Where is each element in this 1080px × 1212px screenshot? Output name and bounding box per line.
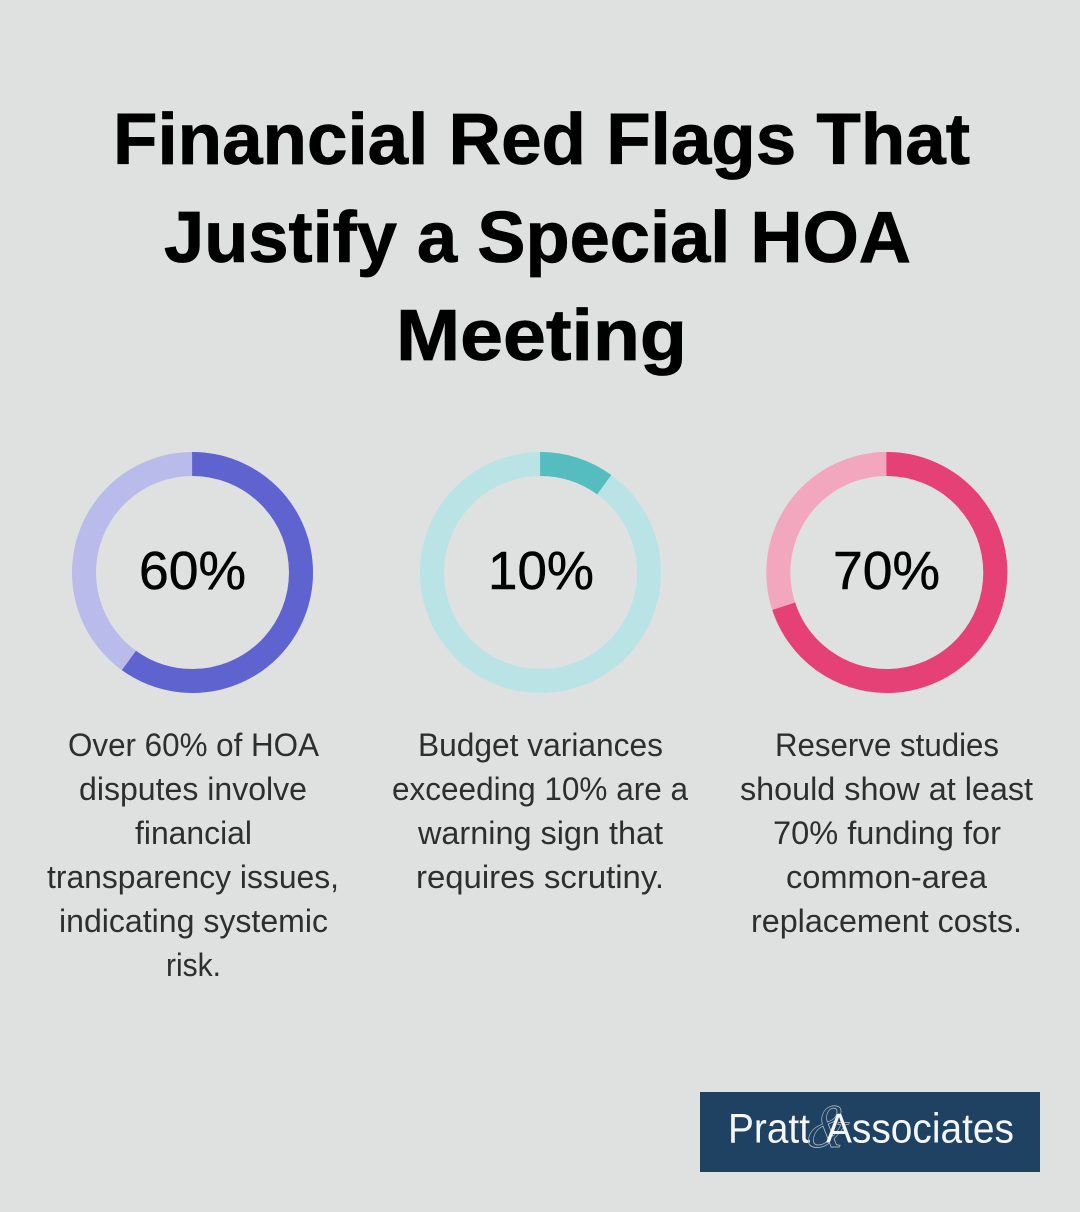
description: 10%: exceeding 10% are a <box>392 771 688 807</box>
logo: Pratt & Associates <box>700 1092 1040 1172</box>
description: 70%: 70% funding for <box>773 815 1001 851</box>
panel: 60% statistic <box>47 464 339 983</box>
value: 60%: 60% <box>139 541 246 601</box>
logo: Pratt & Associates: Pratt <box>728 1104 810 1152</box>
logo: Pratt & Associates: & <box>800 1093 858 1161</box>
title: Meeting <box>396 296 687 376</box>
description: 70%: should show at least <box>740 771 1033 807</box>
description: 10%: requires scrutiny. <box>416 859 664 895</box>
title <box>113 100 970 376</box>
donut chart: 10% <box>432 464 649 681</box>
description: 10%: Budget variances <box>418 727 663 763</box>
title: Justify a Special HOA <box>164 198 911 278</box>
description: 70%: common-area <box>786 859 987 895</box>
logo: Pratt & Associates: Associates <box>826 1104 1014 1152</box>
description: 60%: indicating systemic <box>59 903 328 939</box>
value: 10%: 10% <box>488 541 594 601</box>
description: 60%: transparency issues, <box>47 859 339 895</box>
panel: 10% statistic <box>392 464 688 895</box>
description: 60%: Over 60% of HOA <box>68 727 320 763</box>
description: 60%: risk. <box>166 947 221 983</box>
panel: 70% statistic <box>740 464 1033 939</box>
title: Financial Red Flags That <box>113 100 970 180</box>
description: 60% <box>47 727 339 983</box>
donut chart: 70% <box>778 464 995 681</box>
value: 70%: 70% <box>833 541 940 601</box>
description: 70% <box>740 727 1033 939</box>
description: 10%: warning sign that <box>417 815 663 851</box>
description: 10% <box>392 727 688 895</box>
description: 60%: disputes involve <box>79 771 307 807</box>
description: 70%: replacement costs. <box>751 903 1022 939</box>
donut chart: 60% <box>84 464 301 681</box>
description: 70%: Reserve studies <box>775 727 999 763</box>
description: 60%: financial <box>135 815 252 851</box>
